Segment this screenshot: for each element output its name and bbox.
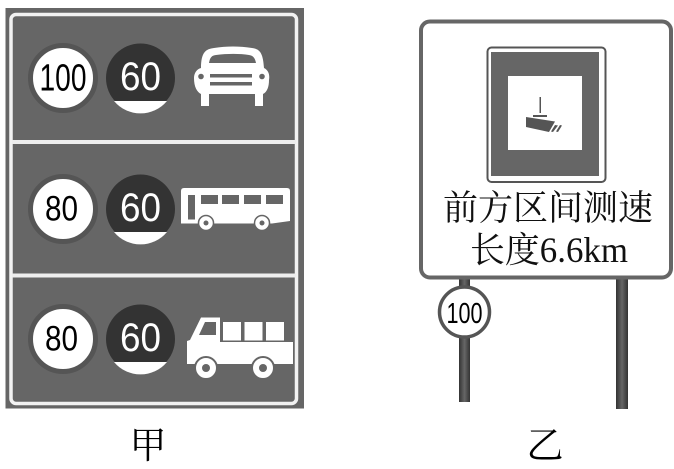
icon: camera warning sign xyxy=(488,48,606,182)
sign: 80 limit: 80 xyxy=(45,190,78,228)
sign board xyxy=(421,22,671,278)
sign text line 1: 前方区间测速 xyxy=(443,189,653,228)
sign: 60 minimum: 60 xyxy=(120,316,161,360)
icon: truck xyxy=(187,318,293,379)
caption: 甲: 甲 xyxy=(130,426,166,467)
icon: camera xyxy=(526,97,562,132)
panel: sign 甲 xyxy=(6,8,304,408)
sign: 100 limit: 100 xyxy=(40,58,86,100)
sign text line 2: 长度6.6km xyxy=(470,230,628,270)
row: truck limits xyxy=(30,304,293,379)
panel: sign 乙 xyxy=(421,22,671,409)
sign: 100 limit on pole xyxy=(440,287,490,337)
icon: car xyxy=(194,46,269,106)
sign: 100 limit on pole: 100 xyxy=(446,298,482,330)
right pole xyxy=(616,279,628,409)
sign: 60 minimum xyxy=(106,44,175,113)
sign: 100 limit xyxy=(30,46,96,110)
row: bus limits xyxy=(30,174,290,244)
sign: 80 limit xyxy=(30,306,96,372)
sign: 60 minimum: 60 xyxy=(120,186,161,230)
sign: 80 limit xyxy=(30,176,96,242)
sign: 60 minimum xyxy=(106,304,175,374)
caption: 乙: 乙 xyxy=(526,426,564,467)
left pole xyxy=(459,279,470,402)
sign: 80 limit: 80 xyxy=(45,320,78,358)
sign: 60 minimum xyxy=(106,174,175,244)
row: car limits xyxy=(30,44,269,113)
icon: bus xyxy=(181,188,290,230)
sign: 60 minimum: 60 xyxy=(120,55,161,99)
